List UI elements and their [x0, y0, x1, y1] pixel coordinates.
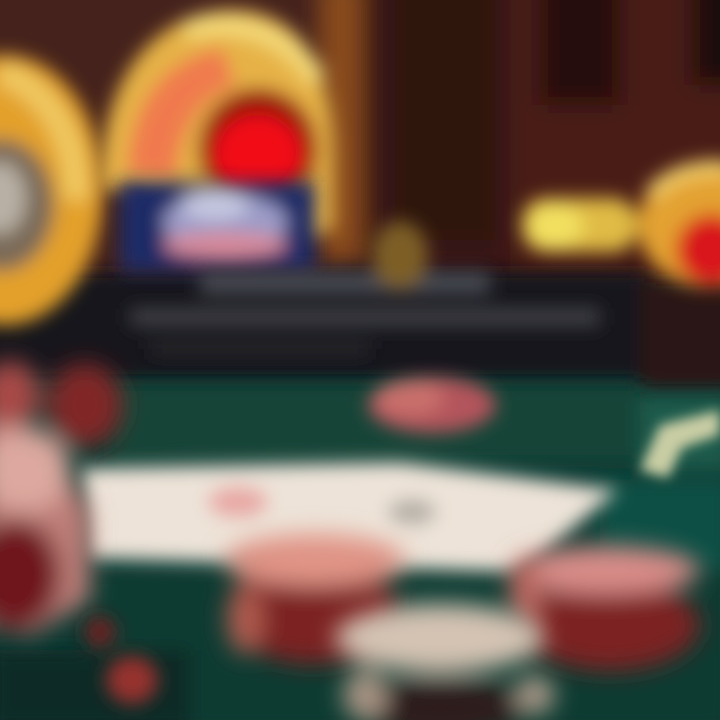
right lights: [522, 163, 720, 287]
central arch light: [100, 10, 334, 240]
back wall: [0, 0, 720, 300]
green table back: [0, 385, 720, 720]
white item right: [640, 410, 720, 478]
white card table: [82, 462, 618, 572]
small chips bottom left: [84, 616, 158, 704]
blurred signage text band: [130, 221, 600, 354]
chips mid table: [368, 377, 496, 433]
left chip stack: [0, 361, 123, 635]
blue screen: [120, 182, 315, 272]
right chip stack: [509, 546, 700, 671]
foreground chips: [335, 604, 555, 720]
dark counter band: [0, 272, 720, 390]
center chip stack: [225, 534, 405, 664]
left arch light: [0, 55, 103, 325]
